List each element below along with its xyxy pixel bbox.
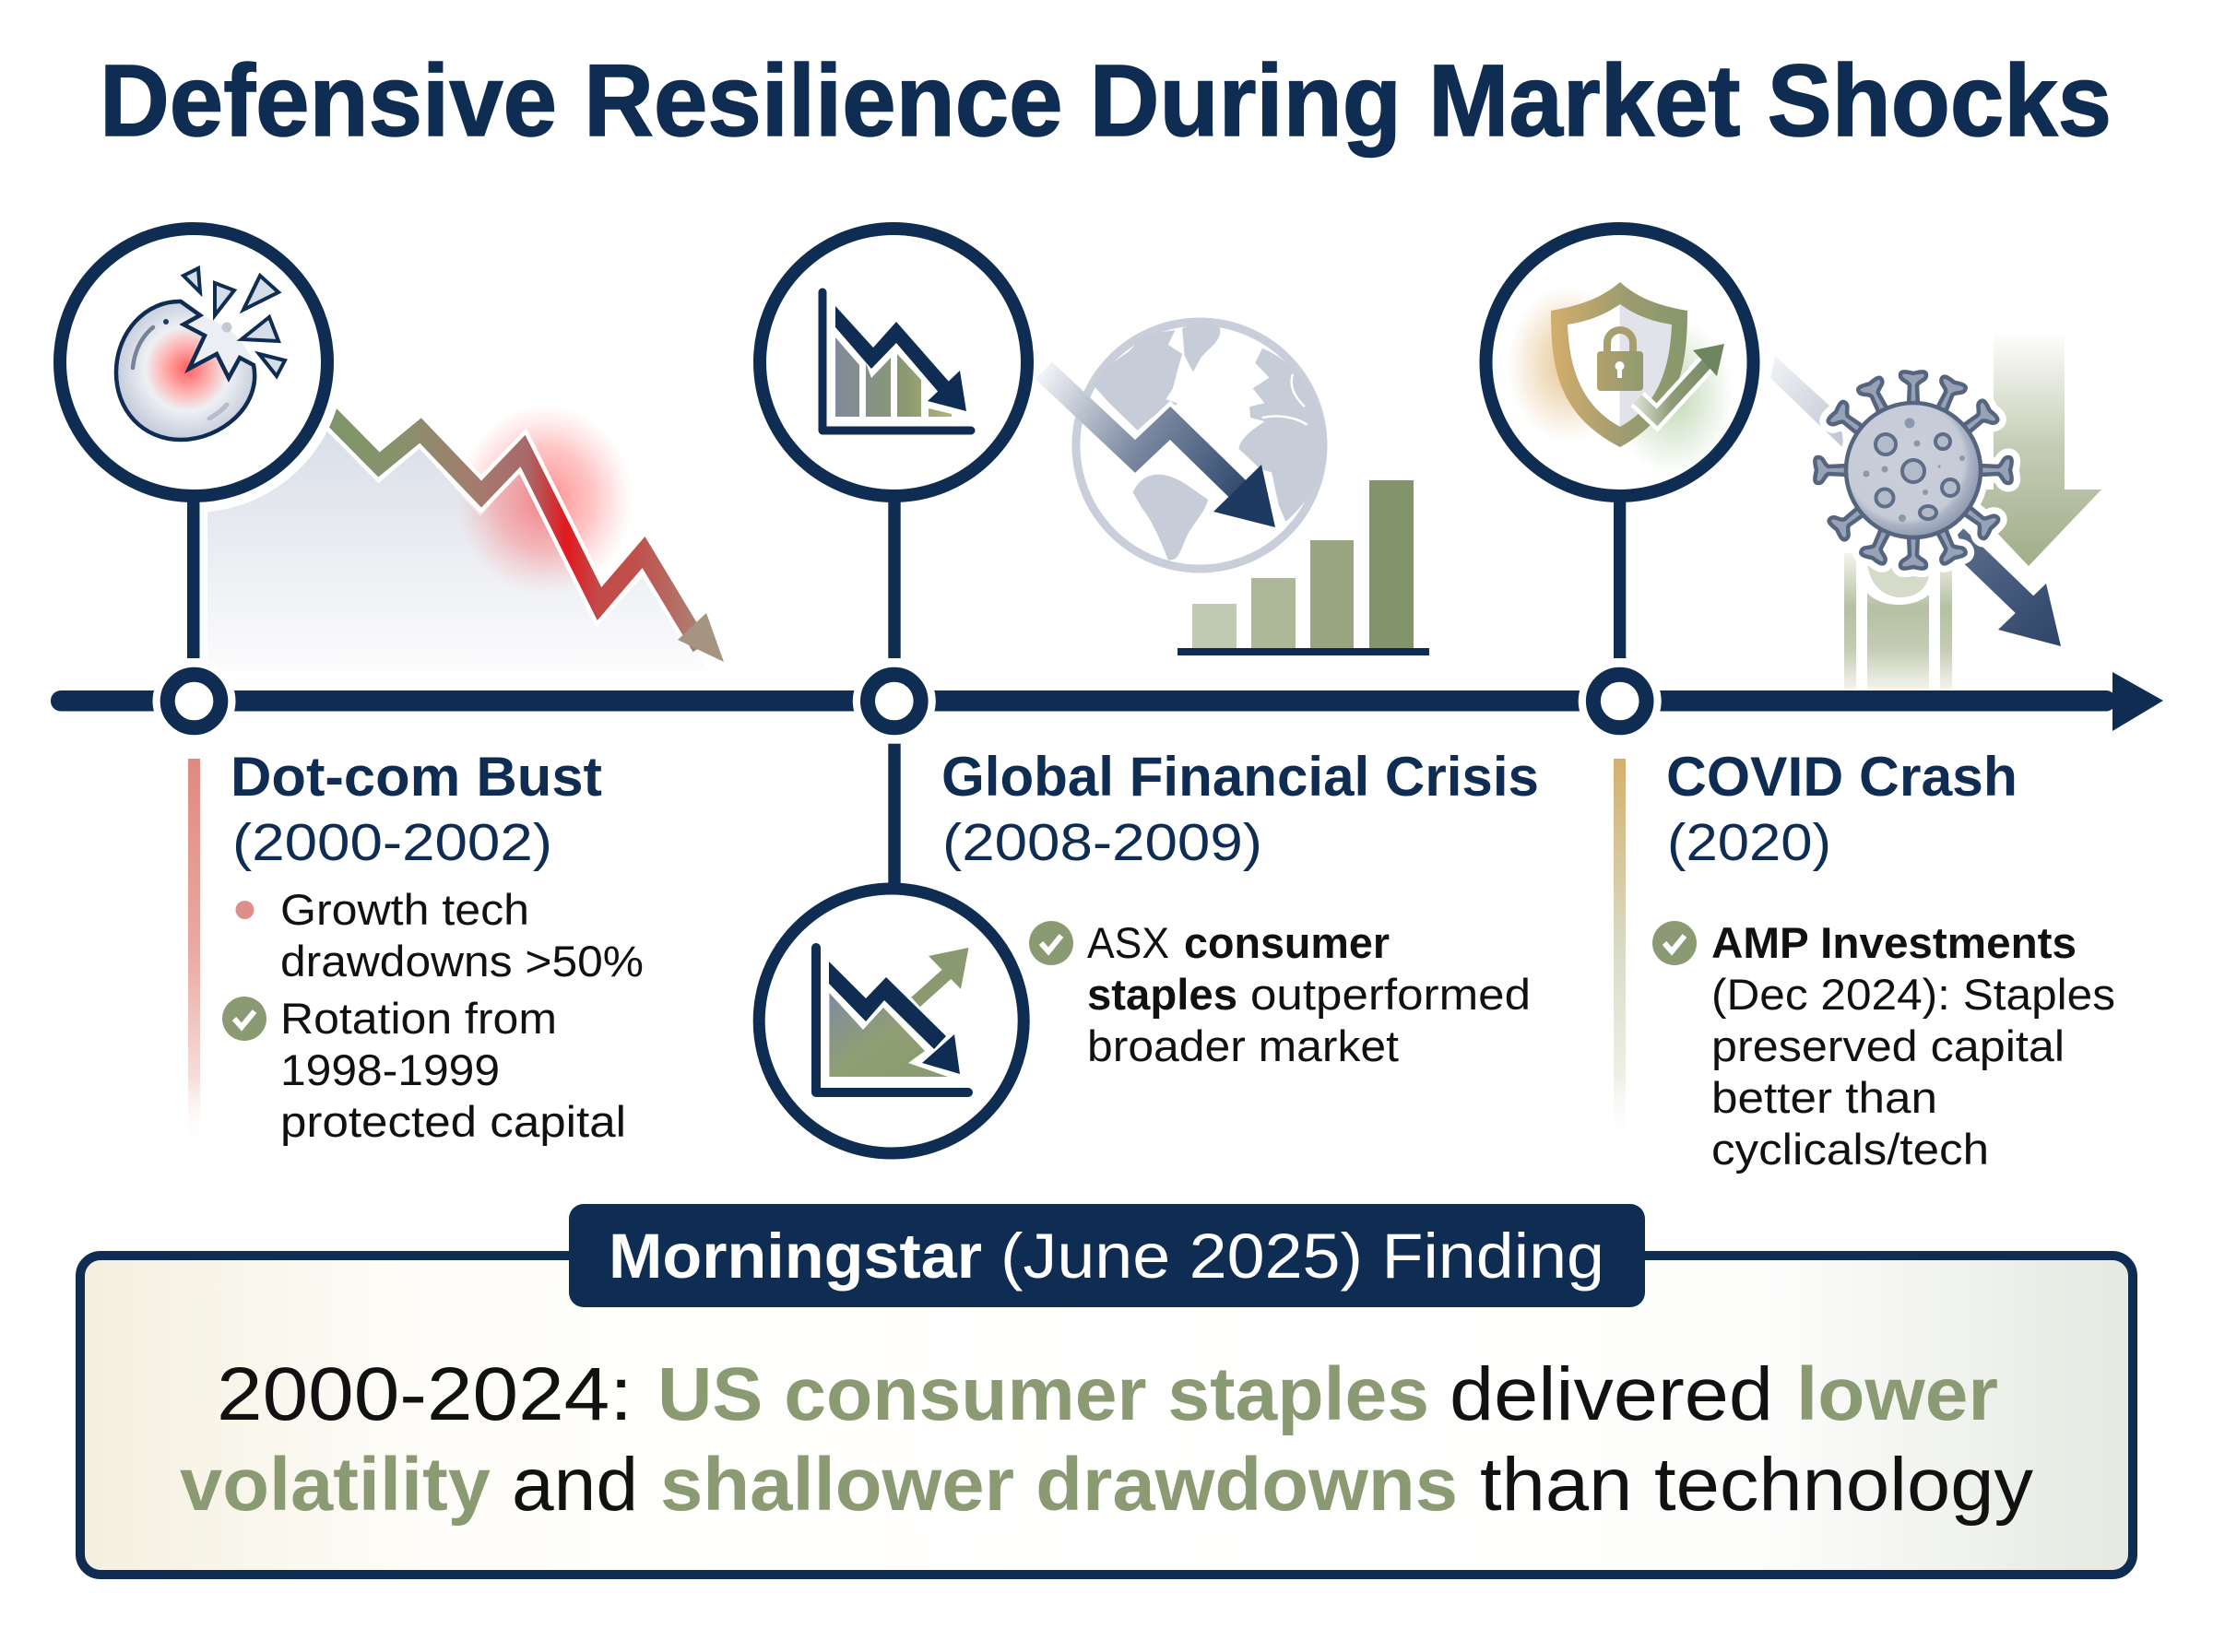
icon: check badge bbox=[1652, 921, 1697, 965]
shield bbox=[1551, 282, 1687, 447]
navy arrow out of virus bbox=[1955, 537, 2061, 646]
bullet text: (Dec 2024): Staples bbox=[1711, 970, 2115, 1019]
axes bbox=[816, 948, 968, 1092]
virus bbox=[1815, 372, 2012, 569]
node: covid bbox=[1579, 660, 1662, 743]
falling arrow bbox=[829, 962, 960, 1074]
bullet text: cyclicals/tech bbox=[1711, 1125, 1989, 1174]
bullet text: growth tech: Growth tech bbox=[280, 885, 529, 934]
bullet text: growth tech bbox=[280, 885, 644, 985]
check arrow bbox=[1638, 344, 1724, 418]
panel: morningstar finding bbox=[80, 1204, 2133, 1575]
red glow bbox=[456, 405, 633, 595]
finding text: US consumer staples bbox=[657, 1352, 1429, 1436]
finding text: and bbox=[512, 1443, 638, 1527]
bullet: red dot bbox=[236, 901, 254, 919]
panel: dot-com bust text bbox=[188, 746, 644, 1146]
green down arrow bbox=[1956, 330, 2101, 566]
zigzag arrow bbox=[314, 398, 724, 662]
bullet text: rotation bbox=[280, 994, 626, 1146]
callout box bbox=[80, 1256, 2133, 1575]
date range: (2008-2009) bbox=[942, 813, 1262, 872]
chart: dot-com drawdown zigzag bbox=[43, 212, 724, 671]
bullet text: preserved capital bbox=[1711, 1021, 2065, 1070]
cracked sphere bbox=[116, 301, 254, 440]
padlock bbox=[1597, 330, 1643, 391]
bullet text: rotation: Rotation from bbox=[280, 994, 557, 1043]
bullet text: ASX bbox=[1087, 918, 1169, 967]
icon circle: cracked sphere bbox=[60, 229, 327, 496]
bullet text: outperformed bbox=[1250, 970, 1531, 1019]
bullet text bbox=[1087, 918, 1531, 1070]
broken inner surface bbox=[183, 315, 254, 378]
heading: Dot-com Bust bbox=[231, 746, 602, 808]
finding text bbox=[180, 1352, 2033, 1527]
fading arrow into virus bbox=[1770, 356, 1844, 449]
bullet text: consumer bbox=[1184, 918, 1390, 967]
bullet text: AMP Investments bbox=[1711, 918, 2077, 967]
chart axes bbox=[822, 292, 971, 431]
finding text: 2000-2024: bbox=[217, 1352, 633, 1436]
shards bbox=[183, 268, 285, 376]
panel: global financial crisis text bbox=[941, 746, 1539, 1070]
tab heading bbox=[569, 1204, 1645, 1307]
white halo around icon circle bbox=[43, 212, 344, 513]
bullet text: rotation: protected capital bbox=[280, 1097, 626, 1146]
green columns bbox=[1844, 553, 1952, 690]
shaded area bbox=[829, 993, 948, 1077]
panel: covid crash text bbox=[1614, 746, 2115, 1174]
bullet text: growth tech: drawdowns >50% bbox=[280, 937, 644, 985]
tab heading: Morningstar bbox=[609, 1221, 982, 1292]
chart: global financial crisis globe, arrow and bars bbox=[1044, 322, 1429, 655]
icon circle: shield with lock bbox=[1486, 229, 1754, 496]
icon: check badge bbox=[1029, 921, 1073, 965]
date range: (2000-2002) bbox=[232, 813, 552, 872]
shaded area under drawdown line bbox=[207, 406, 709, 671]
finding text: lower bbox=[1796, 1352, 1998, 1436]
node: global financial crisis bbox=[853, 660, 936, 743]
finding text: than technology bbox=[1480, 1443, 2033, 1527]
icon: check badge bbox=[222, 997, 266, 1041]
glow bbox=[1508, 286, 1627, 442]
bullet text: rotation: 1998-1999 bbox=[280, 1045, 500, 1094]
tab heading: (June 2025) Finding bbox=[1000, 1221, 1604, 1292]
finding text: delivered bbox=[1450, 1352, 1773, 1436]
bullet text bbox=[1711, 918, 2115, 1174]
falling arrow bbox=[835, 306, 966, 411]
icon circle: falling bar chart bbox=[760, 229, 1027, 496]
heading: COVID Crash bbox=[1666, 746, 2018, 808]
node: dot-com bbox=[153, 660, 236, 743]
globe bbox=[1076, 322, 1327, 569]
accent bar bbox=[188, 759, 200, 1146]
bullet text: staples bbox=[1087, 970, 1237, 1019]
heading: Global Financial Crisis bbox=[941, 746, 1539, 808]
illustration: covid virus with arrows bbox=[1770, 330, 2101, 690]
icon circle: chart with rebound arrow bbox=[759, 889, 1024, 1153]
rising bars bbox=[1178, 480, 1429, 655]
stems connecting icon circles bbox=[187, 498, 1626, 887]
finding text: volatility bbox=[180, 1443, 491, 1527]
bullet text: broader market bbox=[1087, 1021, 1399, 1070]
title: Defensive Resilience During Market Shocks bbox=[100, 44, 2112, 158]
falling arrow over globe bbox=[1044, 371, 1275, 527]
bars bbox=[835, 337, 952, 417]
rising arrow bbox=[916, 948, 968, 1002]
timeline nodes bbox=[153, 660, 1662, 743]
finding text: shallower drawdowns bbox=[660, 1443, 1458, 1527]
bullet text: better than bbox=[1711, 1073, 1937, 1122]
date range: (2020) bbox=[1667, 813, 1831, 872]
accent bar bbox=[1614, 759, 1626, 1146]
timeline axis with arrow bbox=[51, 672, 2163, 731]
